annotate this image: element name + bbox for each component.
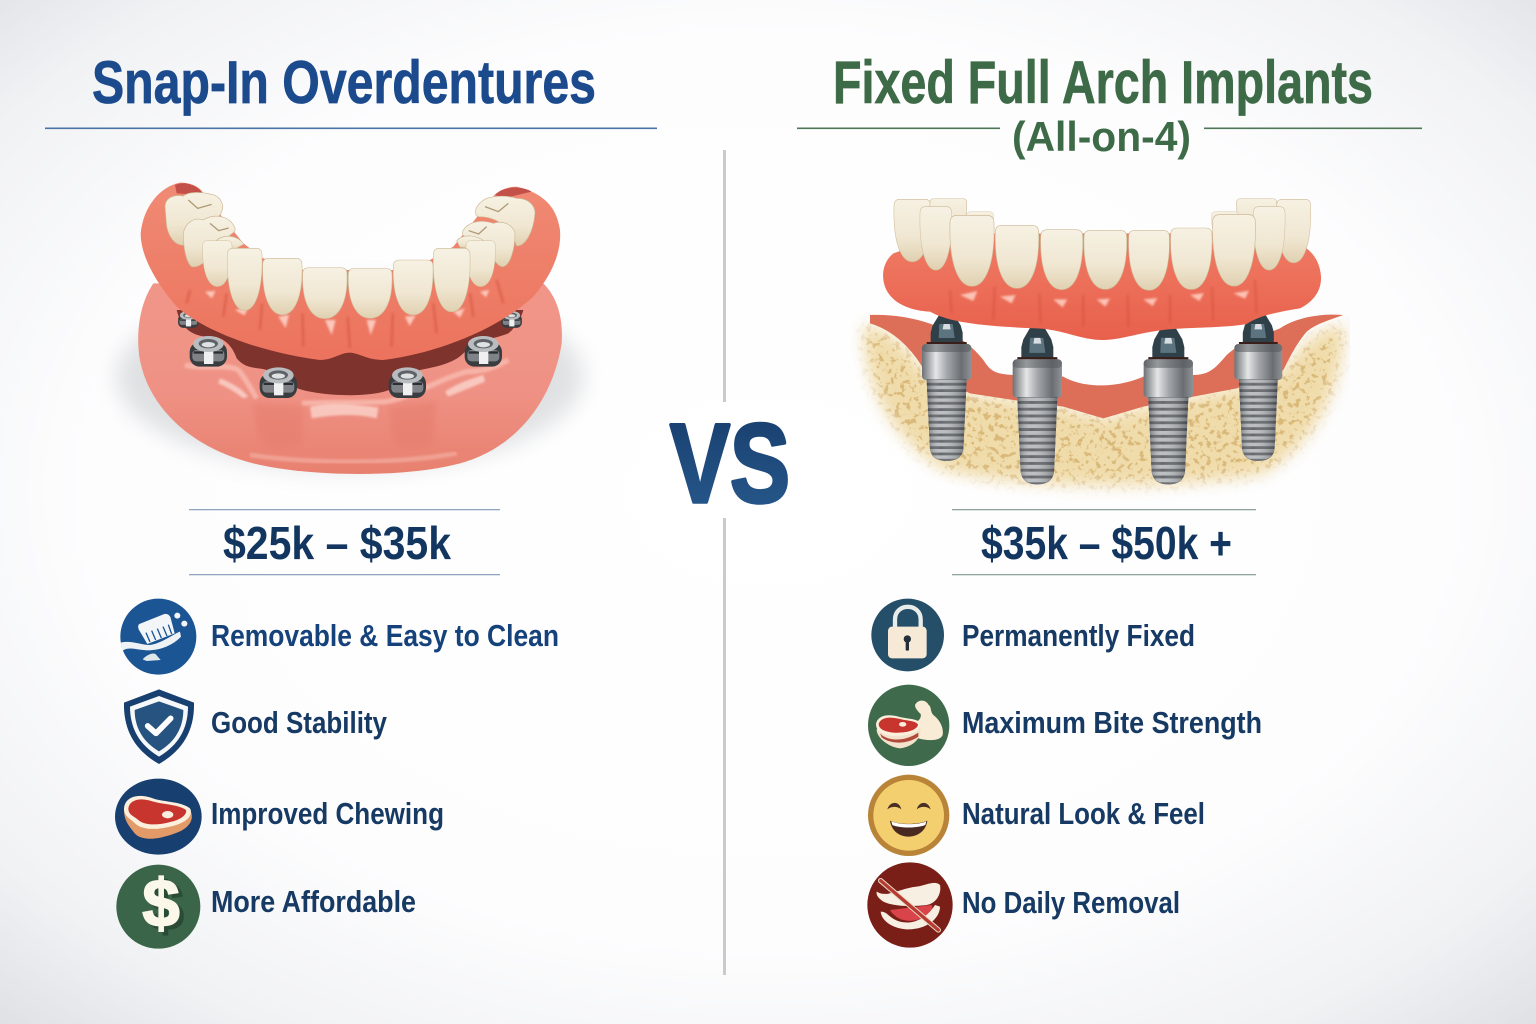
molars right (457, 196, 535, 267)
gum highlights (960, 291, 1249, 307)
icon: dollar: $ (147, 870, 184, 944)
label: Natural Look & Feel: Natural Look & Feel (962, 796, 1205, 831)
abutments (178, 311, 522, 398)
denture pillars (253, 402, 437, 449)
illustration: snap-in overdenture (117, 183, 583, 474)
right heading: Fixed Full Arch Implants (797, 49, 1422, 160)
left price: $25k – $35k (223, 517, 451, 569)
icon: shield with check (124, 689, 194, 764)
base shadow (117, 283, 583, 470)
gum highlights (205, 290, 489, 335)
gum stems (950, 280, 1257, 327)
gum strip over bone (870, 315, 1343, 418)
icon: toothbrush (120, 599, 196, 675)
label: Removable & Easy to Clean: Removable & Easy to Clean (211, 618, 559, 653)
ridge highlight along hollow (185, 360, 508, 403)
left heading: Snap-In Overdentures: Snap-In Overdentures (92, 49, 596, 116)
gum bridge (883, 233, 1321, 340)
lower gum base (138, 283, 562, 474)
label: Good Stability: Good Stability (211, 705, 388, 740)
base highlights (218, 375, 485, 418)
upper denture gum (141, 183, 560, 360)
back teeth (894, 198, 1311, 270)
VS label: VS (670, 401, 790, 526)
molars left (165, 192, 244, 267)
right benefits list (867, 599, 1262, 948)
bone (853, 317, 1350, 496)
label: Permanently Fixed: Permanently Fixed (962, 618, 1195, 653)
left benefits list (115, 599, 559, 949)
icon: padlock (871, 599, 944, 671)
right heading: Fixed Full Arch Implants: Fixed Full Arch Implants (833, 49, 1373, 116)
gum back ends (175, 183, 532, 198)
illustration: fixed implant bridge in bone (850, 198, 1350, 507)
right heading: Fixed Full Arch Implants: (All-on-4) (1012, 113, 1191, 160)
label: More Affordable: More Affordable (211, 884, 416, 919)
implants (922, 315, 1282, 484)
label: Maximum Bite Strength: Maximum Bite Strength (962, 705, 1262, 740)
icon: dollar (116, 865, 200, 949)
icon: smiling face (868, 775, 949, 856)
label: Improved Chewing: Improved Chewing (211, 796, 444, 831)
center divider (723, 150, 726, 975)
gum stems between teeth (187, 280, 503, 348)
icon: dollar: $ (142, 867, 180, 941)
label: No Daily Removal: No Daily Removal (962, 885, 1180, 920)
icon: steak (115, 779, 202, 855)
hollow inside base (177, 310, 523, 395)
icon: steak and flexed arm (868, 685, 949, 766)
right price: $35k – $50k + (981, 517, 1232, 569)
icon: crossed-out dentures (867, 862, 953, 948)
front teeth lower denture (203, 241, 495, 319)
front teeth bridge (950, 215, 1255, 290)
